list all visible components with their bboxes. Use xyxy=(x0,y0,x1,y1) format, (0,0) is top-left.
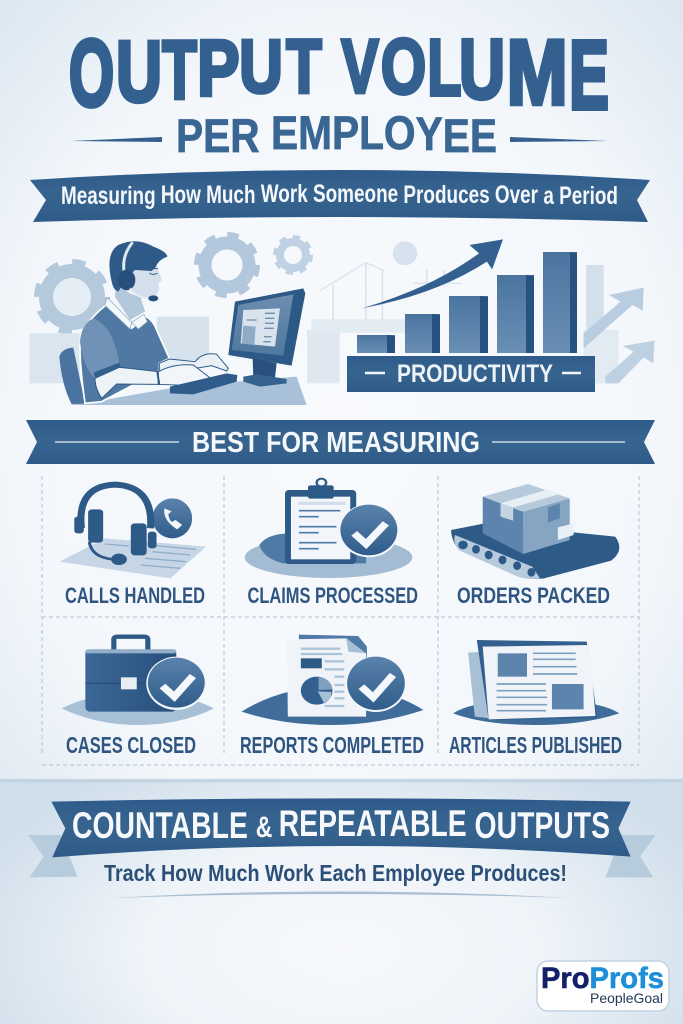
title: output volume: U xyxy=(459,23,505,117)
logo: ProProfs PeopleGoal: ProProfs xyxy=(541,962,664,995)
subtitle: per employee: EMPLO xyxy=(271,106,416,159)
title: output volume: M xyxy=(507,21,568,124)
illustration: employee at computer xyxy=(59,241,307,405)
title: output volume: T xyxy=(286,24,322,109)
subtitle: per employee: EE xyxy=(443,109,497,162)
ribbon body xyxy=(51,798,631,857)
far arm and hand xyxy=(159,354,228,371)
item: articles published xyxy=(449,640,622,758)
title: output volume: O xyxy=(69,21,114,127)
title: output volume: O xyxy=(381,24,426,111)
ribbon text: REPEATABLE xyxy=(279,803,475,844)
base dashes xyxy=(365,372,581,374)
desk xyxy=(72,377,307,405)
label: CALLS HANDLED xyxy=(65,583,205,608)
collar xyxy=(105,298,147,329)
base label: PRODUCTIVITY xyxy=(397,360,553,388)
section divider xyxy=(0,779,683,782)
banner: best for measuring xyxy=(26,420,655,464)
banner: subtitle ribbon: Work Someone xyxy=(261,180,403,208)
item: orders packed xyxy=(451,484,619,608)
title: output volume: L xyxy=(428,23,461,113)
title: output volume: U xyxy=(239,25,283,109)
banner: subtitle ribbon: How Much xyxy=(161,181,261,209)
label: REPORTS COMPLETED xyxy=(240,732,424,758)
ribbon text: COUNTABLE xyxy=(72,805,256,846)
near hand xyxy=(158,365,215,386)
title: output volume: T xyxy=(162,24,197,117)
keyboard xyxy=(170,373,237,394)
neck xyxy=(115,285,145,320)
title: output volume xyxy=(69,21,609,130)
arrow: growth trend xyxy=(361,239,503,308)
icon: clipboard with check xyxy=(245,479,412,578)
ribbon text: OUTPUTS xyxy=(475,805,610,846)
illustration: faint city and arrows backdrop xyxy=(30,241,655,383)
icon: report with check xyxy=(242,635,423,725)
item: calls handled xyxy=(60,485,206,608)
grid lines xyxy=(42,476,639,765)
title: output volume: V xyxy=(341,24,379,109)
subtitle: per employee: PER xyxy=(176,109,273,162)
banner: subtitle ribbon: a Period xyxy=(543,182,618,210)
subtitle: per employee: Y xyxy=(416,107,443,160)
logo: ProProfs PeopleGoal xyxy=(537,961,669,1011)
sleeve xyxy=(80,318,120,378)
tagline underline xyxy=(112,892,569,898)
bars xyxy=(357,252,577,353)
banner: subtitle ribbon xyxy=(30,170,650,222)
eye xyxy=(149,268,158,274)
item: reports completed xyxy=(240,635,424,758)
title: output volume: P xyxy=(197,25,239,113)
ribbon tails xyxy=(28,835,655,877)
title: output volume: U xyxy=(116,23,162,120)
near arm xyxy=(95,367,158,398)
logo: ProProfs PeopleGoal: PeopleGoal xyxy=(590,990,663,1006)
item: cases closed xyxy=(62,637,214,758)
chart base xyxy=(347,356,595,392)
icon: box on conveyor xyxy=(451,484,619,579)
icon: briefcase with check xyxy=(62,637,214,725)
face xyxy=(122,262,162,298)
title side rules xyxy=(71,137,608,142)
torso xyxy=(80,304,169,403)
label: ORDERS PACKED xyxy=(457,583,610,608)
illustration: background gears xyxy=(38,236,310,331)
headset mic xyxy=(130,288,151,298)
background upper section xyxy=(0,0,683,783)
hair xyxy=(109,241,167,292)
monitor xyxy=(228,288,305,366)
chart: productivity bars with arrow xyxy=(347,239,595,392)
ribbon: countable and repeatable outputs xyxy=(28,798,655,877)
banner: subtitle ribbon: Measuring xyxy=(61,182,186,210)
banner: best for measuring: BEST FOR MEASURING xyxy=(192,427,480,459)
headset band xyxy=(124,242,133,271)
item: claims processed xyxy=(245,479,418,608)
title: output volume: E xyxy=(569,21,609,130)
icon: newspaper xyxy=(453,640,619,725)
sleeve cuff xyxy=(93,363,121,378)
icon: headset with phone xyxy=(60,485,206,578)
headset ear cup xyxy=(118,270,135,290)
chair xyxy=(59,348,85,404)
label: CASES CLOSED xyxy=(66,732,196,758)
background lower section xyxy=(0,781,683,1024)
banner: subtitle ribbon: Produces Over xyxy=(403,181,543,209)
tagline: Track How Much Work Each Employee Produces! xyxy=(104,860,567,886)
label: CLAIMS PROCESSED xyxy=(248,583,418,608)
monitor stand xyxy=(253,358,277,378)
ribbon text: & xyxy=(256,811,279,844)
